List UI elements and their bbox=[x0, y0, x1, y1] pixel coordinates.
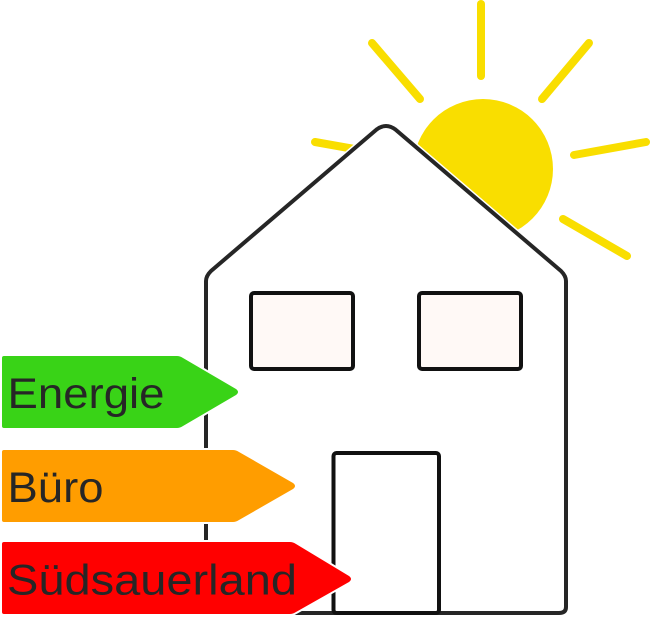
right window bbox=[419, 293, 521, 369]
house outline bbox=[206, 126, 566, 613]
sun disc bbox=[413, 99, 553, 239]
sun rays bbox=[315, 4, 646, 256]
icon: sun bbox=[315, 4, 646, 256]
arrow label: Südsauerland bbox=[2, 542, 351, 614]
left window bbox=[251, 293, 353, 369]
door bbox=[334, 453, 439, 613]
house halo bbox=[206, 126, 566, 613]
arrow label: Büro bbox=[2, 450, 295, 522]
arrow label: Energie bbox=[2, 356, 238, 428]
icon: house bbox=[206, 126, 566, 613]
arrow label: Energie: Energie bbox=[8, 370, 164, 418]
arrow label: Südsauerland: Südsauerland bbox=[7, 556, 297, 604]
arrow label: Büro: Büro bbox=[8, 464, 104, 512]
